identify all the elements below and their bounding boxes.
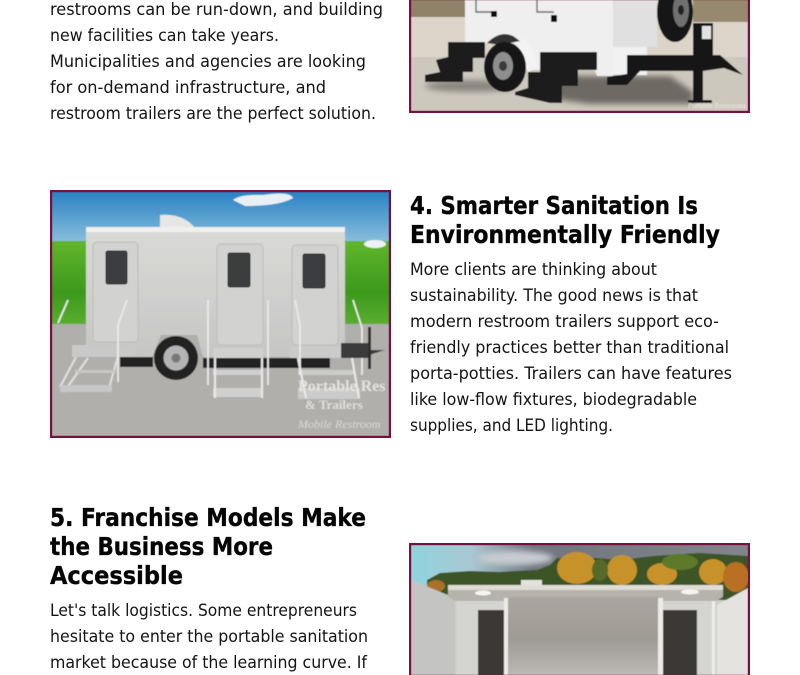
heading: section 5: the Business More <box>50 532 273 561</box>
photo: three-door silver restroom trailer on grass <box>50 190 391 438</box>
photo: white restroom trailer rear with black steps: Portable Restrooms <box>688 101 746 110</box>
text block: section 3 closing paragraph: restroom trailers are the perfect solution. <box>50 104 376 123</box>
heading: section 5 <box>50 503 366 590</box>
photo: restroom trailer front with open doors and autumn trees <box>409 543 750 675</box>
text block: section 4 paragraph: like low-flow fixtures, biodegradable <box>410 390 697 409</box>
heading: section 5: 5. Franchise Models Make <box>50 503 366 532</box>
text block: section 5 paragraph <box>50 601 368 672</box>
text block: section 4 paragraph: friendly practices better than traditional <box>410 338 729 357</box>
photo: three-door silver restroom trailer on grass: & Trailers <box>305 397 363 412</box>
heading: section 4: Environmentally Friendly <box>410 220 720 249</box>
text block: section 3 closing paragraph: Municipalities and agencies are looking <box>50 52 366 71</box>
photo: three-door silver restroom trailer on grass: Portable Res <box>298 378 386 395</box>
text block: section 3 closing paragraph: new facilities can take years. <box>50 26 279 45</box>
text block: section 3 closing paragraph: restrooms can be run-down, and building <box>50 0 383 19</box>
heading: section 5: Accessible <box>50 561 183 590</box>
text block: section 4 paragraph: More clients are thinking about <box>410 260 658 279</box>
text block: section 3 closing paragraph: for on-demand infrastructure, and <box>50 78 326 97</box>
text block: section 5 paragraph: Let's talk logistics. Some entrepreneurs <box>50 601 357 620</box>
text block: section 3 closing paragraph <box>50 0 383 123</box>
text block: section 4 paragraph: supplies, and LED lighting. <box>410 416 613 435</box>
text block: section 4 paragraph <box>410 260 732 435</box>
text block: section 4 paragraph: modern restroom trailers support eco- <box>410 312 719 331</box>
text block: section 4 paragraph: porta-potties. Trailers can have features <box>410 364 732 383</box>
text block: section 5 paragraph: hesitate to enter the portable sanitation <box>50 627 368 646</box>
text block: section 4 paragraph: sustainability. The good news is that <box>410 286 699 305</box>
heading: section 4 <box>410 191 720 249</box>
photo: white restroom trailer rear with black steps <box>409 0 750 113</box>
heading: section 4: 4. Smarter Sanitation Is <box>410 191 698 220</box>
photo: three-door silver restroom trailer on grass: Mobile Restroom <box>297 417 381 431</box>
text block: section 5 paragraph: market because of the learning curve. If <box>50 653 368 672</box>
